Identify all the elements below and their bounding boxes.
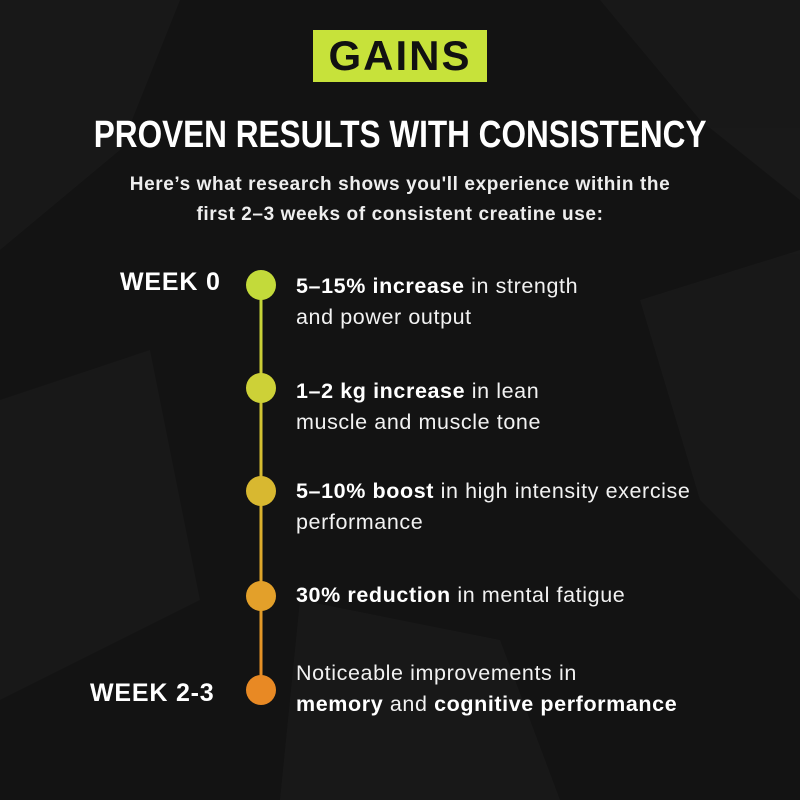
timeline (246, 270, 276, 705)
item 2: muscle and muscle tone (296, 410, 541, 434)
item 1: and power output (296, 305, 472, 329)
subtitle (130, 174, 670, 225)
label: week 0: WEEK 0 (120, 268, 221, 296)
item 5: memory and cognitive performance (296, 692, 677, 716)
item 1: 5–15% increase in strength (296, 274, 578, 298)
item 2: 1–2 kg increase in lean (296, 379, 539, 403)
item 5 (296, 661, 677, 716)
item 3 (296, 479, 690, 534)
item 1 (296, 274, 578, 329)
item 5: Noticeable improvements in (296, 661, 577, 685)
logo: GAINS: GAINS (328, 32, 472, 79)
item 3: performance (296, 510, 423, 534)
subtitle: Here’s what research shows you'll experience within the (130, 174, 670, 195)
title: PROVEN RESULTS WITH CONSISTENCY (94, 114, 706, 156)
item 2 (296, 379, 541, 434)
item 3: 5–10% boost in high intensity exercise (296, 479, 690, 503)
label: week 2-3: WEEK 2-3 (90, 679, 214, 707)
subtitle: first 2–3 weeks of consistent creatine use: (196, 204, 604, 225)
item 4: 30% reduction in mental fatigue (296, 583, 625, 607)
